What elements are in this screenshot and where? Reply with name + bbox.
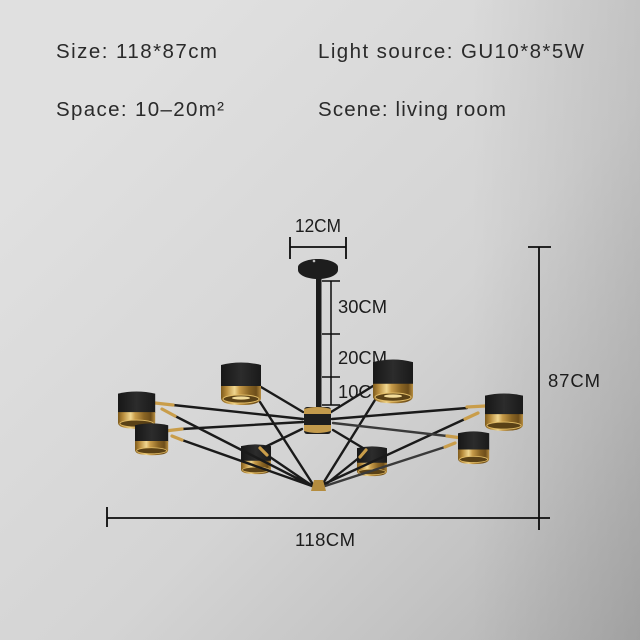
dimension: canopy width 12CM <box>290 215 346 259</box>
chandelier <box>118 259 523 491</box>
dimension: rod heights 30CM 20CM 10CM: 30CM <box>338 296 387 317</box>
lamp: upper right <box>373 360 413 403</box>
support rods <box>173 386 467 487</box>
bottom hub <box>311 480 326 491</box>
lamp: lower right <box>458 431 489 464</box>
central hub <box>304 407 331 434</box>
ceiling canopy and stem <box>298 259 338 408</box>
dimension: width 118CM: 118CM <box>295 529 355 550</box>
spec: space: Space: 10–20m² <box>56 98 224 121</box>
gold brackets <box>155 403 485 457</box>
dimension: width 118CM <box>107 507 550 550</box>
lamp: lower left <box>135 423 168 455</box>
lamp: far right <box>485 393 523 431</box>
lamp: upper left <box>221 362 261 405</box>
back lamp left <box>241 444 271 474</box>
lamp: far left <box>118 391 155 429</box>
dimension: rod heights 30CM 20CM 10CM: 20CM <box>338 347 387 368</box>
spec: light source: Light source: GU10*8*5W <box>318 40 585 63</box>
back lamp right <box>357 446 387 476</box>
dimension: canopy width 12CM: 12CM <box>295 215 341 236</box>
dimension: height 87CM: 87CM <box>548 370 600 391</box>
dimension: height 87CM <box>528 247 600 530</box>
spec: size: Size: 118*87cm <box>56 40 217 63</box>
dimension: rod heights 30CM 20CM 10CM <box>322 281 387 405</box>
spec: scene: Scene: living room <box>318 98 506 121</box>
dimension: rod heights 30CM 20CM 10CM: 10CM <box>338 381 387 402</box>
